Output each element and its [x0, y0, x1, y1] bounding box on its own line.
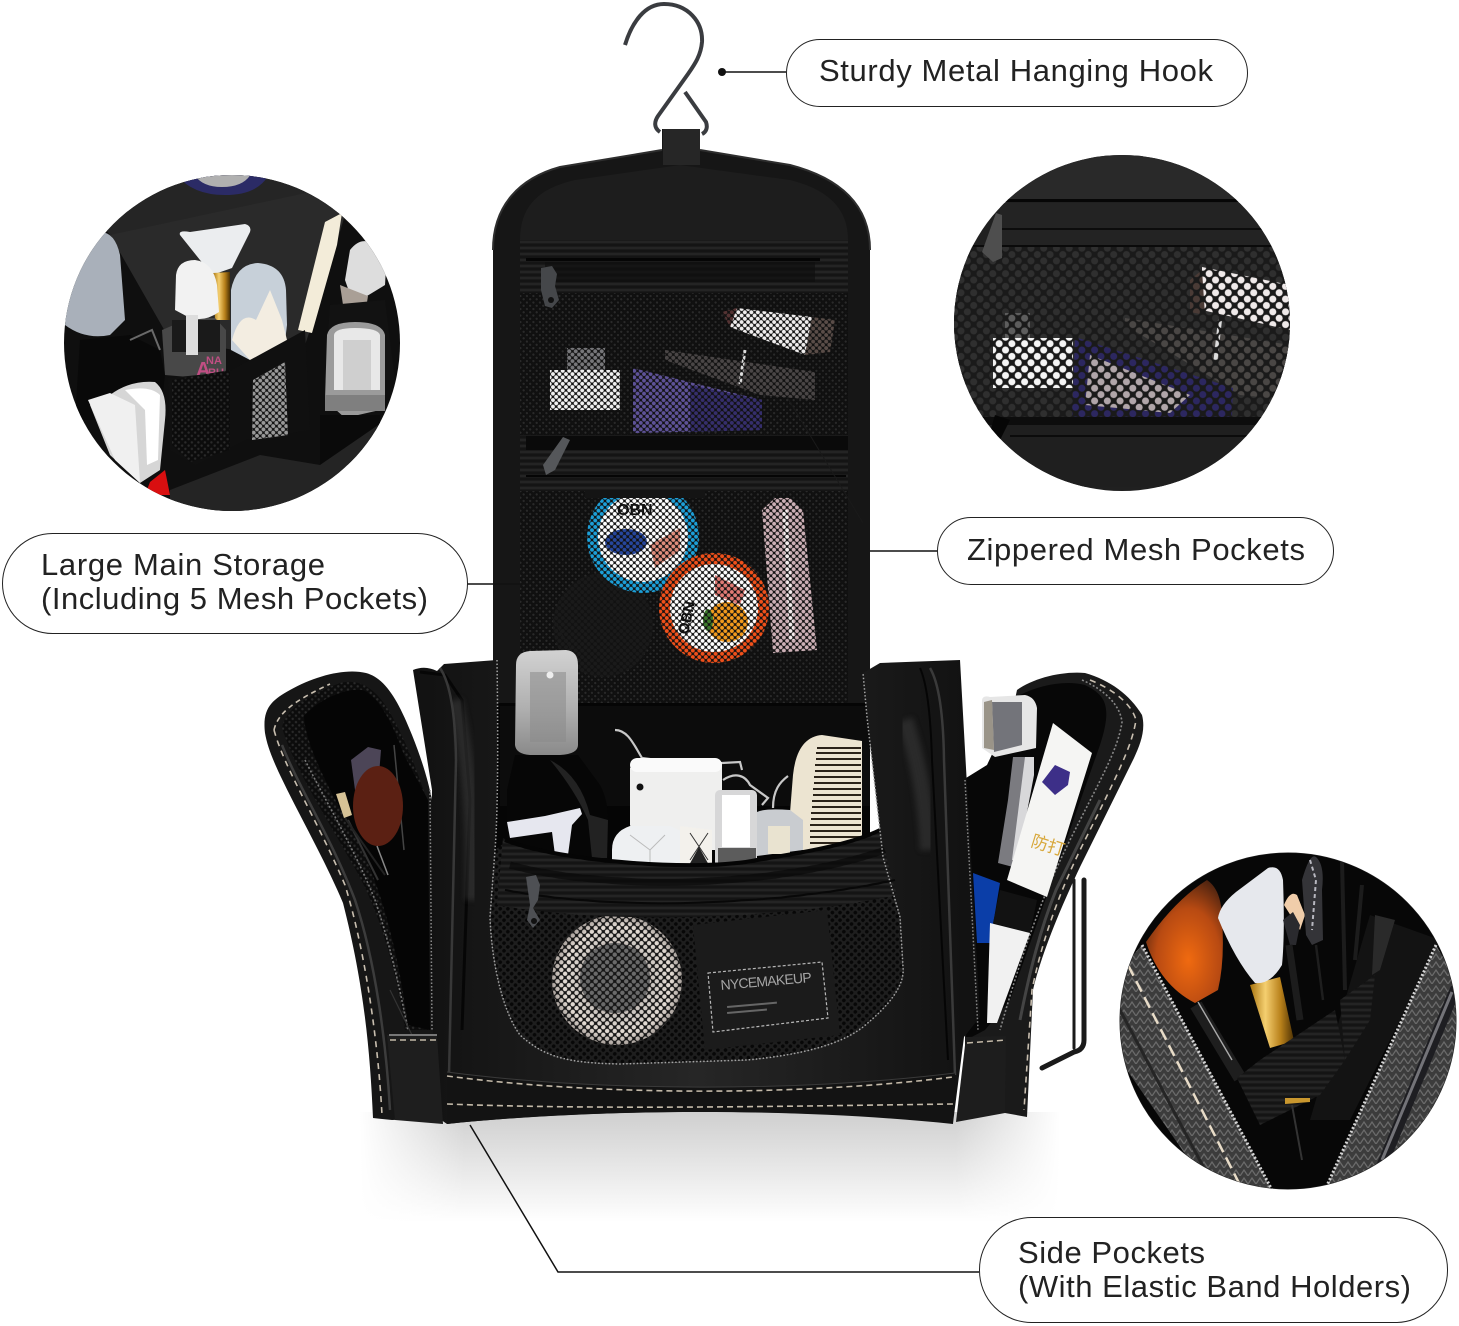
lower mesh pocket: OBN [617, 502, 653, 519]
flask [762, 498, 817, 653]
zipper pull lower [543, 437, 570, 475]
callout: large main storage: Large Main Storage [41, 547, 325, 582]
callout: zippered mesh pockets: Zippered Mesh Pockets [967, 532, 1305, 567]
zipper pull [982, 213, 1002, 262]
black bottle [507, 755, 608, 860]
left spray bottle [76, 405, 83, 420]
bottom fabric [170, 424, 379, 511]
clear spray cap [515, 650, 578, 755]
bag lid [493, 129, 870, 710]
white jar [612, 758, 722, 867]
silver round product [552, 915, 682, 1045]
main zipper around pocket [490, 660, 903, 1064]
pocket fabric band [497, 830, 897, 917]
comb [298, 213, 342, 333]
lower mesh pocket: OBN [675, 600, 699, 636]
lower zipped mesh pocket band [520, 435, 848, 491]
metal wire clips [615, 730, 788, 808]
callout: side pockets: Side Pockets [1018, 1235, 1205, 1270]
side zipper edges [430, 780, 978, 1030]
callout: zippered mesh pockets [870, 518, 1334, 584]
toothbrush [982, 695, 1037, 867]
callout: sturdy metal hanging hook: Sturdy Metal Hanging Hook [819, 53, 1214, 88]
brush handles [1196, 1005, 1240, 1078]
zipper band top [972, 155, 1272, 248]
small spray bottle [715, 790, 757, 867]
circle detail: side pocket brushes [1118, 850, 1459, 1195]
spray bottle with label: RU [208, 367, 224, 379]
callout: side pockets: (With Elastic Band Holders) [1018, 1269, 1411, 1304]
blue jar OBN [587, 481, 699, 593]
right side pocket interior and items [965, 673, 1143, 1117]
blue cap [973, 873, 1000, 943]
callout: sturdy metal hanging hook [718, 40, 1248, 106]
right top spray [345, 241, 386, 300]
front zipper pull [526, 875, 540, 928]
hairline leader in left pocket [390, 990, 412, 1035]
fabric right of elastic [1310, 915, 1440, 1120]
upper mesh pocket [520, 293, 848, 437]
mascara wand [1302, 856, 1323, 1000]
spray bottle with label: A [196, 359, 210, 381]
hairline detail in lid [552, 397, 863, 660]
lower white tube [987, 923, 1030, 1023]
right clear cap bottle [320, 322, 385, 465]
fabric back [110, 190, 345, 360]
main compartment interior [493, 703, 870, 870]
elastic bands [1237, 975, 1375, 1125]
upper zipped mesh pocket band [520, 240, 848, 296]
lower left clear cap [88, 382, 166, 483]
jar [567, 348, 605, 371]
makeup brushes in left pocket [336, 745, 404, 880]
callout: large main storage [2, 534, 525, 634]
white folded product [730, 308, 812, 355]
purple tube [633, 368, 762, 433]
elastic band [993, 890, 1037, 933]
bag items in main compartment [507, 650, 862, 867]
callout: side pockets [470, 1125, 1448, 1322]
clear cap [757, 809, 803, 856]
comb [787, 735, 862, 850]
spray bottle with label: NA [206, 355, 222, 367]
silicone applicator [1218, 867, 1284, 983]
toiletry bag illustration [264, 4, 1143, 1124]
lower band [982, 415, 1262, 487]
metal hanging hook [625, 4, 707, 134]
product card NYCEMAKEUP [693, 910, 840, 1050]
mesh with products [950, 247, 1295, 419]
circle detail: zippered mesh pockets [950, 150, 1295, 495]
mesh panel behind [106, 175, 332, 235]
white toothpaste tube [1007, 723, 1092, 897]
white pump bottle [231, 263, 287, 360]
white toothpaste tube: 防打 [1029, 832, 1067, 860]
small sponge applicator [1283, 894, 1305, 1020]
orange powder brush [1146, 880, 1223, 1003]
red object [145, 470, 170, 495]
floor reflection under bag [360, 1112, 1060, 1222]
dark tube [665, 350, 815, 400]
lower mesh pocket [520, 481, 848, 703]
orange jar OBN [659, 553, 769, 663]
white pump [507, 808, 582, 855]
right grey zipper panel [1325, 945, 1459, 1190]
front mesh pocket [490, 660, 903, 1064]
product card NYCEMAKEUP: NYCEMAKEUP [720, 969, 813, 993]
left grey zipper panel [1120, 945, 1272, 1190]
left side pocket [264, 672, 470, 1120]
zipper pull upper [541, 266, 559, 308]
lower body panels with stitching [387, 1035, 1006, 1124]
silicone spatula [180, 224, 250, 275]
callout: large main storage: (Including 5 Mesh Pockets) [41, 581, 428, 616]
bag body [413, 660, 980, 1124]
circle detail: large main storage [60, 172, 405, 512]
mesh holder [168, 330, 310, 465]
back stand wire, right side [1042, 880, 1084, 1068]
slim black brushes [1342, 860, 1362, 990]
gold brush [1250, 977, 1294, 1048]
spray bottle with label [162, 260, 226, 381]
